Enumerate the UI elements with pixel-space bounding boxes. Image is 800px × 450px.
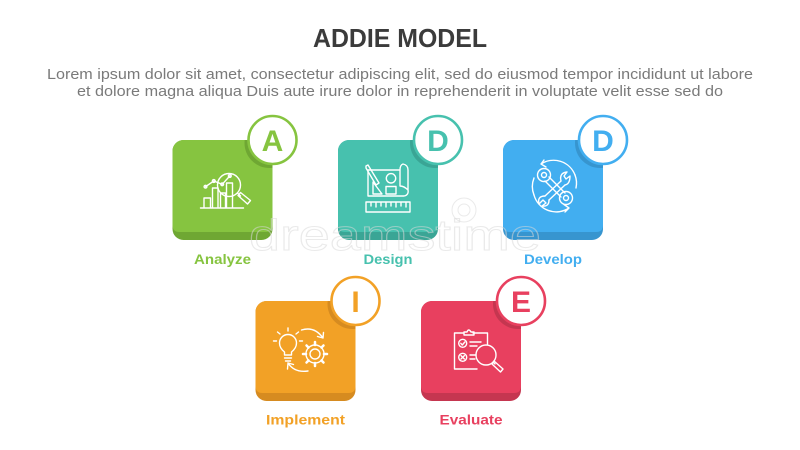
label: Evaluate: Evaluate xyxy=(440,412,503,428)
tile xyxy=(421,301,521,401)
card: Implement xyxy=(256,277,380,428)
letter badge A xyxy=(248,116,296,164)
title: ADDIE MODEL xyxy=(313,23,487,53)
letter badge I xyxy=(332,277,380,325)
watermark: dreamstime xyxy=(249,211,541,260)
label: Analyze: Analyze xyxy=(194,252,252,267)
letter badge D: D xyxy=(427,125,449,158)
tile xyxy=(256,301,356,401)
tile xyxy=(172,140,272,240)
letter badge E: E xyxy=(511,286,531,319)
letter badge D: D xyxy=(592,125,614,158)
label: Develop: Develop xyxy=(524,252,582,267)
description text: Lorem ipsum dolor sit amet, consectetur adipiscing elit, sed do eiusmod tempor incididunt ut labore xyxy=(47,66,753,83)
description text xyxy=(47,66,753,100)
tile xyxy=(338,140,438,240)
watermark xyxy=(249,198,541,260)
card: Develop xyxy=(503,116,627,267)
icon: circular arrows with tools xyxy=(532,160,577,212)
letter badge A: A xyxy=(262,125,283,158)
card: Evaluate xyxy=(421,277,545,428)
tile xyxy=(503,140,603,240)
icon: chart with magnifier xyxy=(200,174,250,208)
letter badge D xyxy=(579,116,627,164)
description text: et dolore magna aliqua Duis aute irure dolor in reprehenderit in voluptate velit esse sed do xyxy=(77,83,723,100)
icon: clipboard with magnifier xyxy=(454,330,503,372)
card: Design xyxy=(338,116,462,267)
icon: blueprint and ruler xyxy=(366,164,410,212)
icon: lightbulb and gear xyxy=(274,328,327,371)
letter badge E xyxy=(497,277,545,325)
label: Implement: Implement xyxy=(266,412,346,428)
letter badge I: I xyxy=(351,286,360,319)
card: Analyze xyxy=(172,116,296,267)
label: Design: Design xyxy=(364,252,412,267)
letter badge D xyxy=(414,116,462,164)
